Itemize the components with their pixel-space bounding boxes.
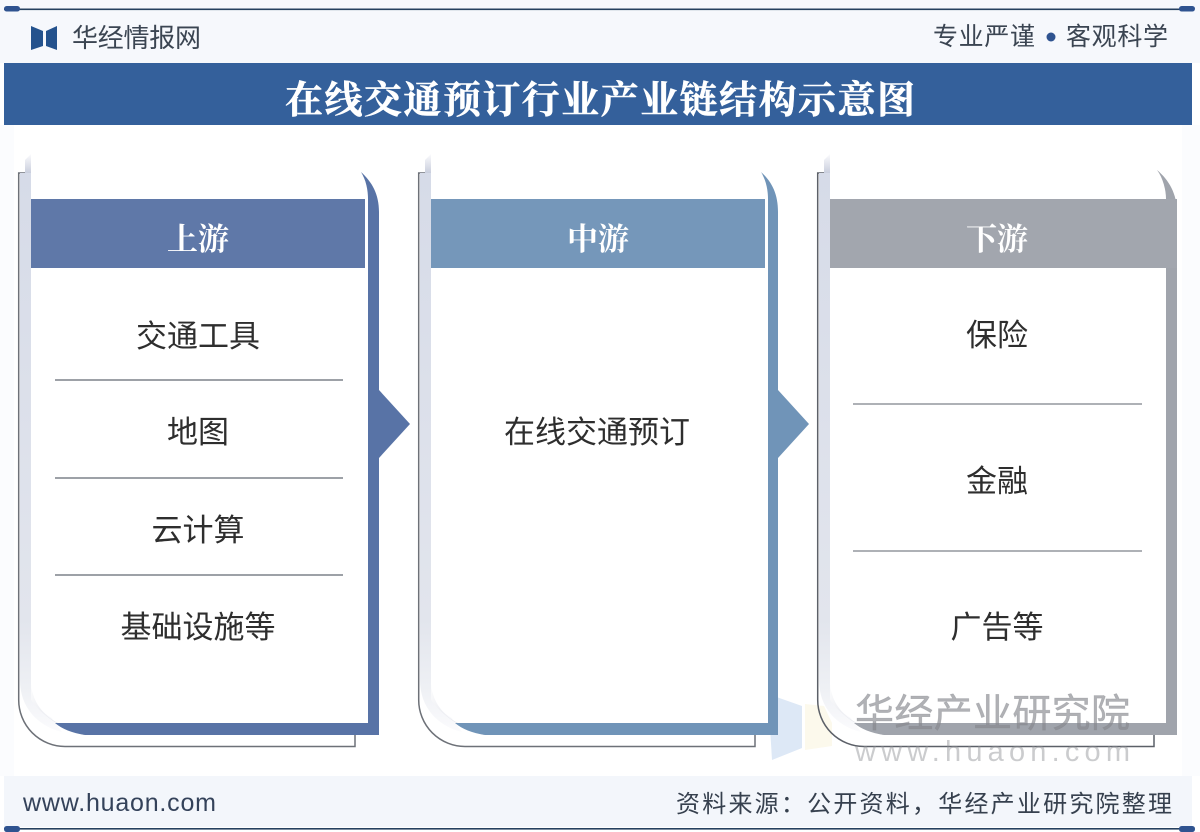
top rule	[4, 6, 1195, 12]
item: 基础设施等: 基础设施等	[120, 610, 276, 645]
paper curl	[819, 173, 861, 732]
logo icon	[31, 26, 57, 50]
title banner	[4, 63, 1192, 125]
panel outline	[419, 173, 755, 746]
watermark: 华经产业研究院	[855, 693, 1130, 736]
header: 上游	[31, 199, 365, 268]
header: 上游: 上游	[167, 222, 229, 257]
slogan: 专业严谨	[933, 23, 1035, 51]
panel: upstream	[19, 154, 379, 746]
paper curl	[420, 173, 462, 732]
item: 保险: 保险	[966, 318, 1028, 353]
accent edge	[854, 170, 1177, 735]
source note: 资料来源：公开资料，华经产业研究院整理	[676, 791, 1172, 818]
slogan: 客观科学	[1066, 23, 1168, 51]
card	[830, 155, 1166, 723]
panel: downstream	[818, 154, 1177, 746]
panel: midstream	[419, 154, 778, 746]
watermark	[854, 693, 1130, 768]
arrow: upstream to midstream	[379, 390, 410, 458]
item: 在线交通预订: 在线交通预订	[504, 415, 690, 450]
watermark: www.huaon.com	[854, 736, 1130, 768]
bottom rule	[4, 826, 1195, 832]
arrow: midstream to downstream	[778, 390, 809, 458]
accent edge	[455, 172, 778, 735]
watermark logo shapes	[768, 694, 832, 760]
header: 中游: 中游	[567, 222, 629, 257]
card	[31, 155, 368, 723]
slogan	[933, 23, 1168, 51]
header: 中游	[431, 199, 765, 268]
item: 地图: 地图	[167, 415, 229, 450]
item: 金融: 金融	[966, 464, 1028, 499]
item: 广告等: 广告等	[950, 610, 1044, 645]
card	[431, 155, 768, 723]
footer band	[4, 776, 1192, 827]
paper curl	[20, 173, 62, 732]
item: 云计算: 云计算	[152, 513, 244, 548]
panel outline	[818, 173, 1154, 746]
panel outline	[19, 173, 355, 746]
title: 在线交通预订行业产业链结构示意图	[285, 79, 915, 122]
logo text: 华经情报网	[72, 23, 201, 53]
header: 下游: 下游	[966, 222, 1028, 257]
accent edge	[55, 172, 379, 735]
website: www.huaon.com	[22, 789, 216, 817]
header: 下游	[830, 199, 1177, 268]
item: 交通工具: 交通工具	[136, 319, 260, 354]
